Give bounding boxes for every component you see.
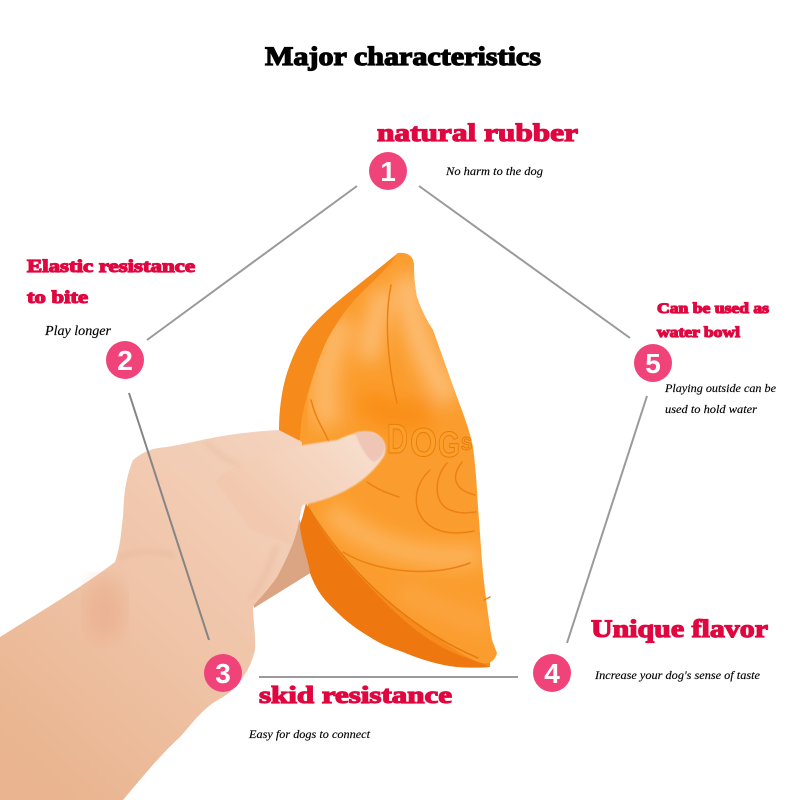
frisbee front face	[300, 252, 497, 664]
description 2: Play longer	[44, 323, 112, 338]
heading 5: Can be used as	[657, 301, 769, 317]
description 1: No harm to the dog	[445, 166, 543, 178]
badge 2: 2	[117, 345, 133, 376]
feature 5: water bowl	[634, 301, 776, 416]
description 5: Playing outside can be	[664, 383, 776, 395]
frisbee embossed DOG lettering: D	[387, 415, 408, 462]
frisbee embossed DOG lettering: O	[410, 421, 437, 465]
frisbee embossed DOG lettering	[387, 415, 472, 465]
lower fingers behind the frisbee	[245, 500, 312, 608]
heading 5 second line: water bowl	[657, 325, 740, 341]
badge 5: 5	[645, 348, 661, 379]
frisbee shadowed underside	[300, 503, 490, 667]
heading 4: Unique flavor	[591, 616, 768, 643]
badge 4	[533, 654, 571, 692]
badge 4: 4	[544, 658, 560, 689]
badge 2	[106, 341, 144, 379]
badge 3	[204, 654, 242, 692]
frisbee moulded grooves	[308, 285, 490, 658]
badge 1: 1	[380, 156, 396, 187]
description 5 second line: used to hold water	[665, 404, 758, 416]
photo: hand holding orange frisbee	[0, 245, 505, 800]
wrist blush	[85, 578, 125, 642]
frisbee embossed DOG lettering: S	[461, 434, 472, 454]
heading 3: skid resistance	[259, 683, 452, 709]
hand creases	[118, 442, 277, 600]
badge 5	[634, 344, 672, 382]
pentagon connector lines	[129, 186, 647, 677]
frisbee embossed DOG lettering: G	[438, 424, 460, 465]
badge 1	[369, 152, 407, 190]
thumb	[215, 432, 386, 545]
description 3: Easy for dogs to connect	[248, 729, 371, 741]
heading 1: natural rubber	[377, 120, 578, 147]
hand and forearm	[0, 430, 386, 800]
heading 2: Elastic resistance	[27, 256, 195, 276]
feature 1: natural rubber	[369, 120, 578, 190]
frisbee silhouette and rim	[279, 253, 490, 668]
frisbee highlight bands	[324, 275, 490, 625]
title: Major characteristics	[265, 42, 541, 71]
feature 4: unique flavor	[533, 616, 768, 692]
feature 3: skid resistance	[204, 654, 452, 741]
heading 2 second line: to bite	[27, 287, 88, 307]
description 4: Increase your dog's sense of taste	[594, 670, 760, 682]
badge 3: 3	[215, 658, 231, 689]
feature 2: elastic resistance	[27, 256, 195, 379]
thumbnail	[355, 431, 385, 462]
